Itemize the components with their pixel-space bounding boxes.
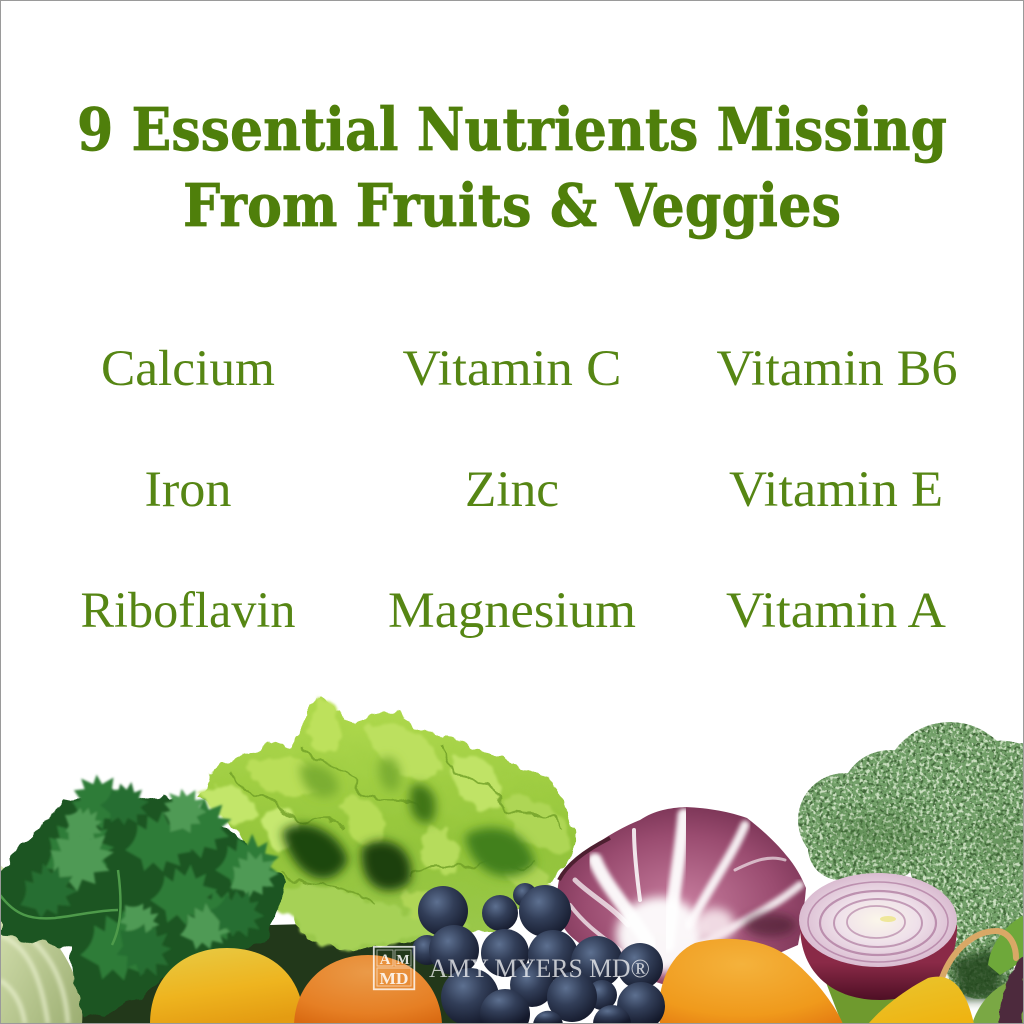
logo mark <box>374 947 414 989</box>
dark shadow backdrop <box>70 920 470 1024</box>
nutrient: Iron: Iron <box>144 462 232 518</box>
grapes <box>412 883 665 1024</box>
logo mark: M <box>396 953 410 968</box>
title: From Fruits & Veggies <box>183 171 841 240</box>
leaves right edge <box>972 915 1024 1024</box>
nutrient: Riboflavin: Riboflavin <box>80 583 296 639</box>
orange right <box>659 939 843 1024</box>
lemon <box>150 948 304 1024</box>
logo wordmark: AMY MYERS MD® <box>429 954 650 983</box>
nutrient: Magnesium: Magnesium <box>388 583 636 639</box>
nutrient: Zinc: Zinc <box>465 462 559 518</box>
vegetable and fruit photo band <box>0 697 1024 1024</box>
nutrient: Calcium: Calcium <box>101 341 275 397</box>
logo mark: MD <box>380 969 408 988</box>
lettuce <box>197 697 574 950</box>
logo mark: A <box>380 952 391 968</box>
green leaves behind orange <box>825 980 905 1024</box>
radicchio <box>557 807 806 985</box>
broccoli <box>798 722 1024 1000</box>
brand logo <box>374 947 650 989</box>
nutrient: Vitamin E: Vitamin E <box>729 462 943 518</box>
nutrient list <box>80 341 958 639</box>
orange left <box>294 955 442 1024</box>
title <box>77 95 947 240</box>
red onion <box>799 873 957 1000</box>
nutrient: Vitamin C: Vitamin C <box>402 341 622 397</box>
pear and stem <box>868 931 1016 1024</box>
nutrient: Vitamin B6: Vitamin B6 <box>716 341 958 397</box>
parsley <box>0 763 287 1018</box>
cabbage <box>0 865 82 1024</box>
nutrient: Vitamin A: Vitamin A <box>726 583 946 639</box>
